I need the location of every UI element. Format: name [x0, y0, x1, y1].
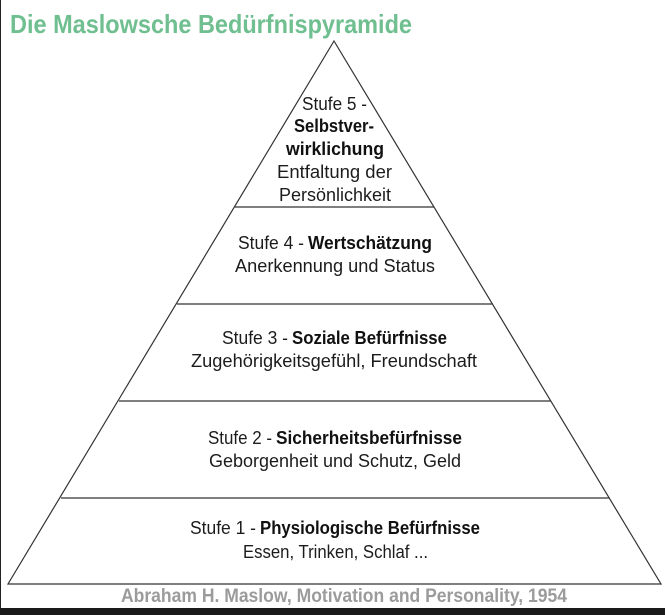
level 5: Selbstverwirklichung: Stufe 5 -	[302, 94, 367, 114]
level 3: Soziale Bedürfnisse	[191, 328, 477, 371]
level 1: Physiologische Bedürfnisse: Physiologische Befürfnisse	[260, 518, 480, 538]
level 1: Physiologische Bedürfnisse	[190, 518, 480, 562]
level 4: Wertschätzung: Stufe 4 -	[238, 233, 304, 253]
level 5: Selbstverwirklichung: wirklichung	[285, 139, 384, 159]
level 1: Physiologische Bedürfnisse: Essen, Trinken, Schlaf ...	[243, 542, 428, 562]
source credit: Abraham H. Maslow, Motivation and Personality, 1954	[121, 586, 567, 607]
level 3: Soziale Bedürfnisse: Stufe 3 -	[222, 328, 288, 348]
level 5: Selbstverwirklichung	[277, 94, 392, 205]
level 4: Wertschätzung: Wertschätzung	[308, 233, 432, 253]
level 3: Soziale Bedürfnisse: Zugehörigkeitsgefühl, Freundschaft	[191, 351, 477, 371]
level 2: Sicherheitsbedürfnisse: Geborgenheit und Schutz, Geld	[209, 451, 461, 471]
level 5: Selbstverwirklichung: Entfaltung der	[277, 162, 392, 182]
level 1: Physiologische Bedürfnisse: Stufe 1 -	[190, 518, 256, 538]
level 2: Sicherheitsbedürfnisse	[208, 428, 462, 471]
level 3: Soziale Bedürfnisse: Soziale Befürfnisse	[292, 328, 447, 348]
level 4: Wertschätzung: Anerkennung und Status	[235, 256, 435, 276]
title: Die Maslowsche Bedürfnispyramide	[10, 9, 412, 39]
level 2: Sicherheitsbedürfnisse: Sicherheitsbefürfnisse	[276, 428, 462, 448]
level 5: Selbstverwirklichung: Selbstver-	[294, 116, 374, 136]
level 2: Sicherheitsbedürfnisse: Stufe 2 -	[208, 428, 272, 448]
level 4: Wertschätzung	[235, 233, 435, 276]
level 5: Selbstverwirklichung: Persönlichkeit	[279, 185, 391, 205]
